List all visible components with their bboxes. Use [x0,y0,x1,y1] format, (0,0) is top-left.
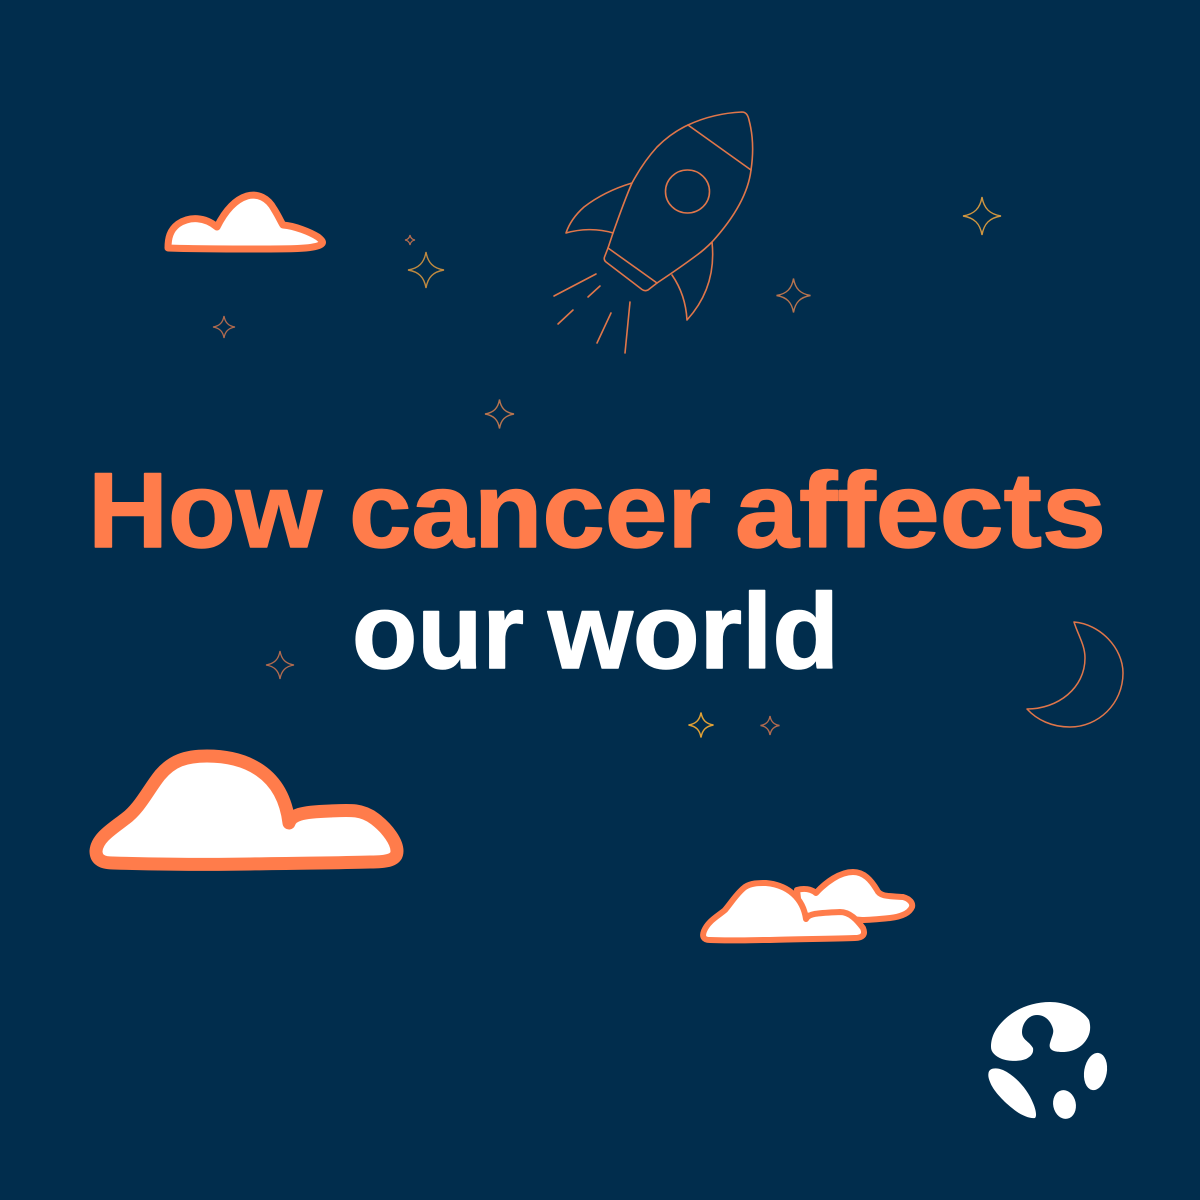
title line two [352,571,839,691]
title line two: world [547,571,839,691]
cloud pair: lower right [703,872,912,940]
title line one: affects [735,450,1106,570]
star: right of rocket [776,278,810,312]
logo [988,1002,1110,1121]
title [88,450,1106,691]
star: small top left [405,235,415,245]
star: gold below title [688,712,714,738]
star: left of second line [266,651,294,679]
cloud: top left [168,195,322,249]
back cloud [797,872,912,920]
star: above title [485,400,514,428]
logo: bottom dot [1050,1088,1079,1121]
logo: left blob [988,1068,1036,1118]
title line one [88,450,1106,570]
front cloud [703,883,864,940]
icon: rocket [554,112,753,353]
title line one: How [88,450,323,570]
title line two: our [352,571,524,691]
logo: top ring shape [991,1002,1090,1061]
logo: right dot [1081,1051,1110,1092]
star: below top cloud [213,316,235,338]
star: top right [963,197,1001,235]
title line one: cancer [349,450,711,570]
icon: crescent moon [1027,622,1123,727]
cloud: large lower left [96,756,397,864]
star: gold near top cloud [408,252,444,288]
star: brown below title [760,716,780,735]
